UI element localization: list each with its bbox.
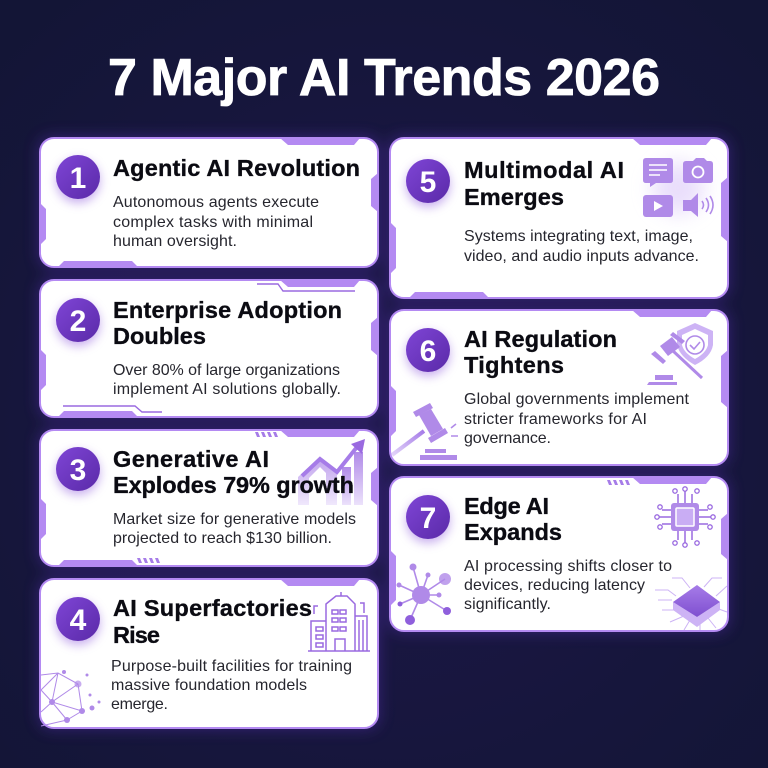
heading 5 <box>464 157 624 210</box>
heading 4: Rise <box>113 622 160 648</box>
description 3: Market size for generative models <box>113 511 356 528</box>
panel: card 1 Agentic AI Revolution <box>40 138 378 267</box>
icon: factory building <box>308 592 370 651</box>
number badge 3 <box>56 447 100 495</box>
panel: card 7 Edge AI Expands <box>390 477 728 631</box>
title: 7 Major AI Trends 2026 <box>108 49 660 107</box>
icon: network sphere <box>41 670 100 726</box>
icon: isometric chip <box>655 578 727 630</box>
icon: growth chart <box>298 439 365 505</box>
heading 2 <box>113 297 342 349</box>
description 3 <box>113 511 356 547</box>
panel: card 5 Multimodal AI Emerges <box>390 138 728 298</box>
heading 2: Enterprise Adoption <box>113 297 342 323</box>
number badge 1 <box>56 155 100 203</box>
panel: card 6 AI Regulation Tightens <box>390 310 728 465</box>
number badge 2 <box>56 298 100 346</box>
heading 3 <box>113 446 354 498</box>
heading 3: Generative AI <box>113 446 269 472</box>
icon: speaker <box>683 193 713 217</box>
heading 6: Tightens <box>464 352 564 378</box>
number badge 2: 2 <box>70 305 86 338</box>
heading 5: Emerges <box>464 184 564 210</box>
description 7: devices, reducing latency <box>464 577 645 594</box>
number badge 3: 3 <box>70 454 86 487</box>
description 4 <box>111 658 352 713</box>
heading 7: Expands <box>464 519 562 545</box>
icon: shield and gavel <box>647 323 713 385</box>
icon: camera <box>683 158 713 183</box>
heading 2: Doubles <box>113 323 206 349</box>
heading 4: AI Superfactories <box>113 595 312 621</box>
icon: hub network <box>396 564 451 625</box>
description 2: Over 80% of large organizations <box>113 362 340 379</box>
heading 7 <box>464 493 562 545</box>
description 1: Autonomous agents execute <box>113 194 319 211</box>
card glow <box>38 136 730 730</box>
description 2 <box>113 362 341 398</box>
description 7: significantly. <box>464 596 551 613</box>
description 4: Purpose-built facilities for training <box>111 658 352 675</box>
description 1: complex tasks with minimal <box>113 214 313 231</box>
heading 5: Multimodal AI <box>464 157 624 183</box>
description 6: Global governments implement <box>464 391 690 408</box>
number badge 4 <box>56 597 100 645</box>
description 5: video, and audio inputs advance. <box>464 248 699 265</box>
description 6: stricter frameworks for AI <box>464 411 647 428</box>
heading 6: AI Regulation <box>464 326 617 352</box>
heading 3: Explodes 79% growth <box>113 472 354 498</box>
panel: card 2 Enterprise Adoption Doubles <box>40 280 378 417</box>
heading 1: Agentic AI Revolution <box>113 155 360 181</box>
icon: processor chip <box>655 487 715 547</box>
heading 4 <box>113 595 312 648</box>
number badge 6 <box>406 328 450 376</box>
icon: video <box>643 195 673 217</box>
number badge 5: 5 <box>420 166 436 199</box>
decorative stripes <box>137 432 278 563</box>
description 5: Systems integrating text, image, <box>464 228 693 245</box>
description 5 <box>464 228 699 265</box>
icon: gavel bottom left <box>392 403 458 460</box>
description 4: massive foundation models <box>111 677 307 694</box>
description 6: governance. <box>464 430 551 447</box>
description 1: human oversight. <box>113 233 237 250</box>
description 6 <box>464 391 690 447</box>
description 1 <box>113 194 319 250</box>
heading 6 <box>464 326 617 378</box>
panel: card 3 Generative AI Explodes <box>40 430 378 566</box>
number badge 5 <box>406 159 450 207</box>
icon: chat bubble <box>643 158 673 187</box>
heading 7: Edge AI <box>464 493 549 519</box>
number badge 7 <box>406 495 450 543</box>
number badge 6: 6 <box>420 335 436 368</box>
description 2: implement AI solutions globally. <box>113 381 341 398</box>
description 4: emerge. <box>111 696 168 713</box>
number badge 1: 1 <box>70 162 86 195</box>
description 3: projected to reach $130 billion. <box>113 530 332 547</box>
number badge 4: 4 <box>70 604 87 637</box>
description 7: AI processing shifts closer to <box>464 558 672 575</box>
description 7 <box>464 558 672 613</box>
panel: card 4 AI Superfactories Rise <box>40 579 378 728</box>
number badge 7: 7 <box>420 502 436 535</box>
icon: media types <box>643 158 713 217</box>
